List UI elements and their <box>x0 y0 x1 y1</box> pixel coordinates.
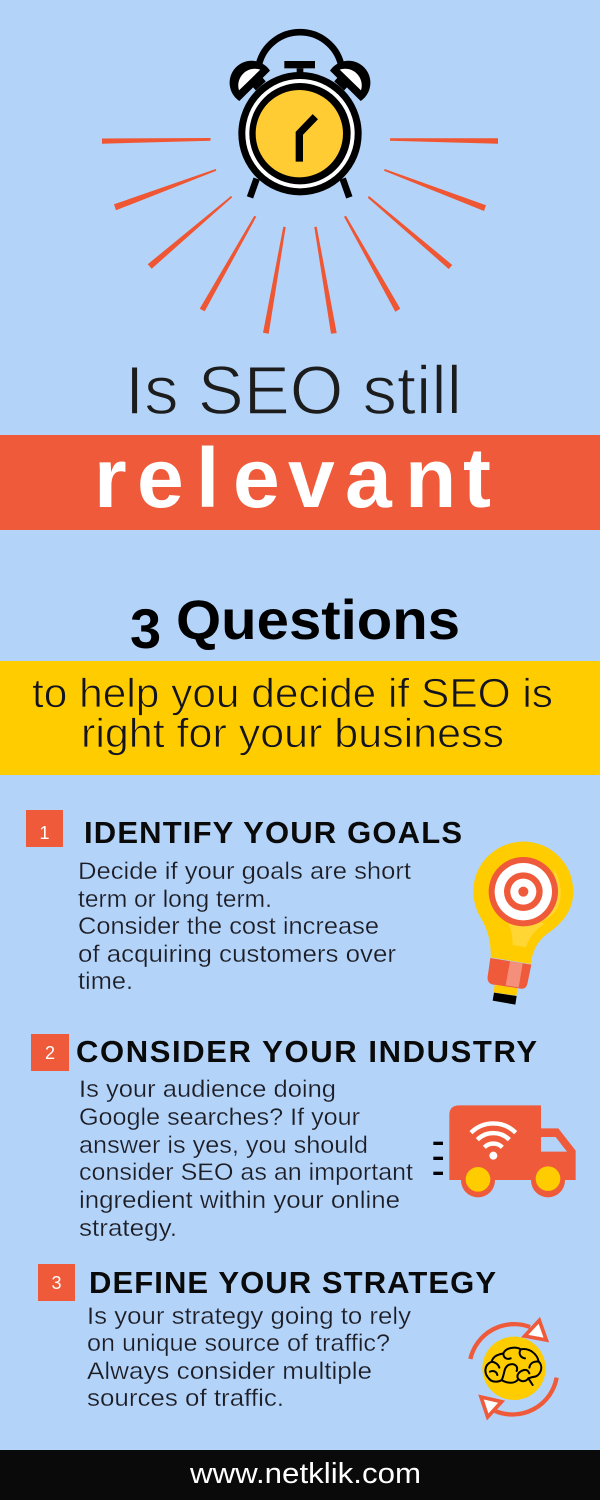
body text: on unique source of traffic? <box>87 1330 390 1357</box>
icon: light bulb with target <box>473 842 573 1005</box>
footer bar: www.netklik.com <box>189 1458 421 1490</box>
body text: answer is yes, you should <box>79 1132 368 1159</box>
number badge 3 <box>38 1264 75 1301</box>
banner: subtitle: to help you decide if SEO is <box>32 670 553 716</box>
body text: Always consider multiple <box>87 1358 372 1385</box>
number badge 2 <box>31 1034 69 1071</box>
number badge 1 <box>26 810 63 847</box>
sunburst rays <box>102 138 498 334</box>
heading: 3 Questions: 3 <box>130 597 161 660</box>
body text: Is your audience doing <box>79 1076 336 1103</box>
body text: Google searches? If your <box>79 1104 360 1131</box>
body text <box>78 858 411 995</box>
heading: 3 Questions: Questions <box>176 588 460 651</box>
body text: term or long term. <box>78 886 272 913</box>
section 2: consider your industry <box>31 1034 537 1242</box>
icon: brain with cycle arrows <box>470 1320 557 1417</box>
body text <box>87 1303 411 1412</box>
banner: subtitle <box>0 661 600 775</box>
body text: of acquiring customers over <box>78 941 396 968</box>
body text <box>79 1076 413 1242</box>
banner: subtitle: right for your business <box>81 710 504 756</box>
banner: relevant: relevant <box>94 431 491 525</box>
body text: Is your strategy going to rely <box>87 1303 411 1330</box>
body text: consider SEO as an important <box>79 1159 413 1186</box>
number badge 1: 1 <box>39 823 50 843</box>
heading: DEFINE YOUR STRATEGY <box>89 1265 496 1300</box>
body text: strategy. <box>79 1215 177 1242</box>
body text: time. <box>78 968 133 995</box>
section 1: identify your goals <box>26 810 462 995</box>
body text: ingredient within your online <box>79 1187 400 1214</box>
heading: IDENTIFY YOUR GOALS <box>84 815 462 850</box>
footer bar <box>0 1450 600 1500</box>
icon: delivery truck with wifi <box>433 1105 576 1197</box>
body text: Consider the cost increase <box>78 913 379 940</box>
body text: sources of traffic. <box>87 1385 284 1412</box>
number badge 3: 3 <box>51 1273 62 1293</box>
heading: CONSIDER YOUR INDUSTRY <box>76 1034 537 1069</box>
icon: alarm clock <box>230 32 370 197</box>
number badge 2: 2 <box>45 1043 55 1063</box>
banner: relevant <box>0 431 600 530</box>
section 3: define your strategy <box>38 1264 496 1412</box>
title: Is SEO still: Is SEO still <box>125 352 462 429</box>
body text: Decide if your goals are short <box>78 858 411 885</box>
